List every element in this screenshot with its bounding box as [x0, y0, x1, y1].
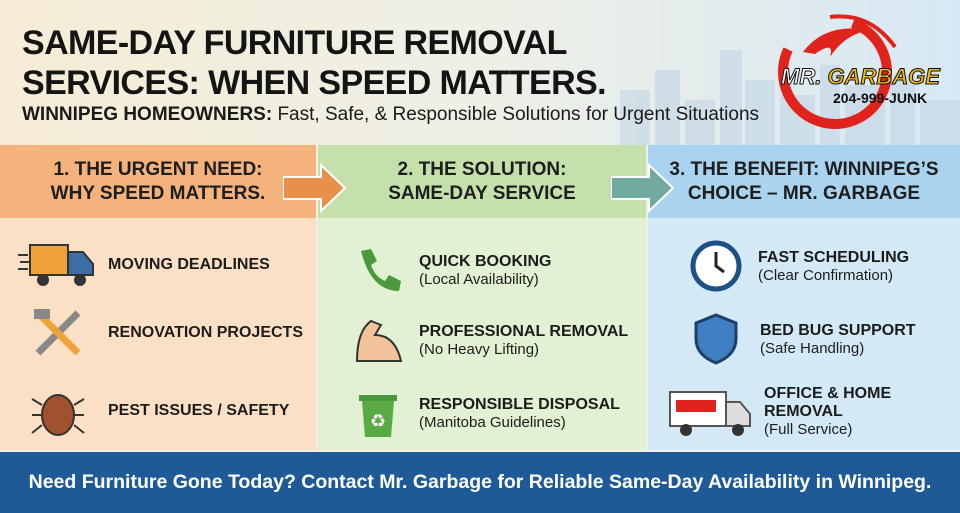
title [22, 24, 606, 102]
item: quick booking: (Local Availability) [419, 270, 539, 288]
item: fast scheduling: (Clear Confirmation) [758, 266, 893, 284]
footer [0, 452, 960, 513]
item: pest [31, 394, 290, 436]
arrow 2 [611, 163, 674, 213]
logo: MR. GARBAGE [781, 64, 940, 89]
panel 3 heading [648, 145, 960, 218]
item: moving deadlines [18, 244, 270, 286]
footer: Need Furniture Gone Today? Contact Mr. Garbage for Reliable Same-Day Availability in Winnipeg. [29, 471, 931, 493]
title: SAME-DAY FURNITURE REMOVAL [22, 24, 567, 62]
item: pest: PEST ISSUES / SAFETY [108, 402, 289, 419]
item: moving deadlines: MOVING DEADLINES [108, 256, 270, 273]
header background [0, 0, 960, 145]
item: quick booking [361, 249, 551, 291]
item: office home removal: REMOVAL [764, 403, 843, 420]
panel 2 heading: SAME-DAY SERVICE [388, 182, 576, 204]
item: office home removal: (Full Service) [764, 421, 852, 438]
item: renovation: RENOVATION PROJECTS [108, 324, 303, 341]
item: quick booking: QUICK BOOKING [419, 252, 551, 270]
panel 3 heading: CHOICE – MR. GARBAGE [688, 182, 920, 204]
skyline [620, 50, 960, 145]
logo: 204-999-JUNK [833, 90, 927, 106]
item: responsible disposal: (Manitoba Guidelines) [419, 414, 566, 430]
panel: solution [318, 145, 646, 450]
item: bed bug support: BED BUG SUPPORT [760, 322, 916, 338]
item: bed bug support: (Safe Handling) [760, 340, 864, 356]
panel 2 heading [318, 145, 646, 218]
panel 1 heading [0, 145, 316, 218]
panel 3 heading: 3. THE BENEFIT: WINNIPEG’S [669, 158, 939, 180]
item: responsible disposal: RESPONSIBLE DISPOSAL [419, 396, 620, 412]
item: fast scheduling: FAST SCHEDULING [758, 248, 909, 266]
item: professional removal: (No Heavy Lifting) [419, 340, 539, 358]
item: professional removal: PROFESSIONAL REMOVAL [419, 322, 628, 340]
item: office home removal [669, 385, 891, 438]
panel: urgent need [0, 145, 316, 450]
panel 1 heading: 1. THE URGENT NEED: [53, 158, 263, 180]
item: responsible disposal [359, 395, 620, 437]
title: SERVICES: WHEN SPEED MATTERS. [22, 64, 606, 102]
panel 1 heading: WHY SPEED MATTERS. [51, 182, 265, 204]
subtitle: WINNIPEG HOMEOWNERS: Fast, Safe, & Responsible Solutions for Urgent Situations [22, 104, 759, 125]
panel 2 heading: 2. THE SOLUTION: [398, 158, 566, 180]
arrow 1 [283, 163, 346, 213]
logo [778, 14, 942, 129]
item: professional removal [356, 320, 628, 362]
item: office home removal: OFFICE & HOME [764, 385, 891, 402]
item: responsible disposal: ♻ [370, 411, 386, 431]
panel: benefit [648, 145, 960, 450]
item: bed bug support [694, 313, 916, 365]
item: renovation [34, 309, 303, 356]
item: fast scheduling [690, 240, 909, 292]
